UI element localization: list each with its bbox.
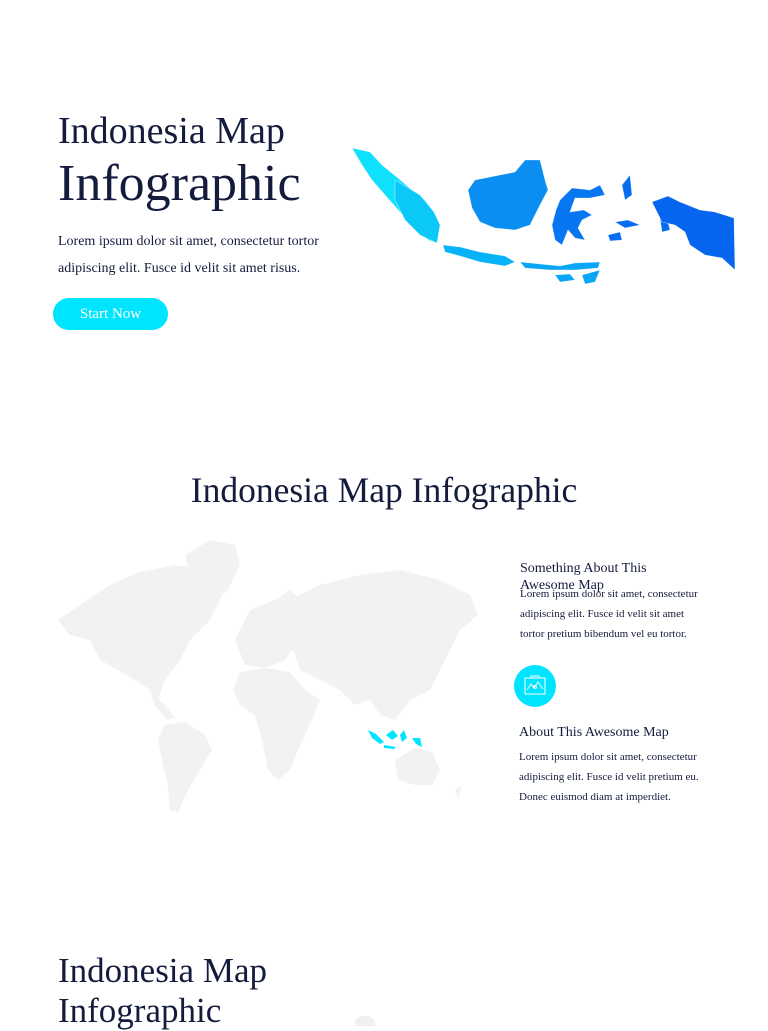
text block: about this map <box>519 725 699 803</box>
bottom map hint <box>355 1016 375 1026</box>
bottom title <box>58 951 267 1030</box>
bottom title: Indonesia Map <box>58 951 267 990</box>
body <box>520 588 698 640</box>
icon: map <box>514 665 556 707</box>
hero title: Indonesia Map <box>58 110 285 152</box>
hero paragraph <box>58 234 319 276</box>
hero title: Infographic <box>58 155 301 212</box>
hero paragraph: adipiscing elit. Fusce id velit sit amet risus. <box>58 261 300 276</box>
world map <box>58 540 478 812</box>
body <box>519 751 699 803</box>
heading: About This Awesome Map <box>519 725 669 740</box>
body: Lorem ipsum dolor sit amet, consectetur <box>520 588 698 600</box>
body: Donec euismod diam at imperdiet. <box>519 791 671 803</box>
hero title <box>58 110 301 212</box>
body: adipiscing elit. Fusce id velit sit amet <box>520 608 684 620</box>
bottom title: Infographic <box>58 991 221 1030</box>
body: tortor pretium bibendum vel eu tortor. <box>520 628 687 640</box>
button: start now <box>53 298 168 330</box>
text block: something about <box>520 561 698 640</box>
section title: Indonesia Map Infographic <box>191 470 577 510</box>
body: adipiscing elit. Fusce id velit pretium eu. <box>519 771 699 783</box>
hero paragraph: Lorem ipsum dolor sit amet, consectetur tortor <box>58 234 319 249</box>
button: start now: Start Now <box>80 306 141 322</box>
Indonesia map <box>352 148 735 284</box>
Indonesia highlight <box>368 730 422 749</box>
heading: Something About This Awesome Map <box>520 561 647 593</box>
body: Lorem ipsum dolor sit amet, consectetur <box>519 751 697 763</box>
